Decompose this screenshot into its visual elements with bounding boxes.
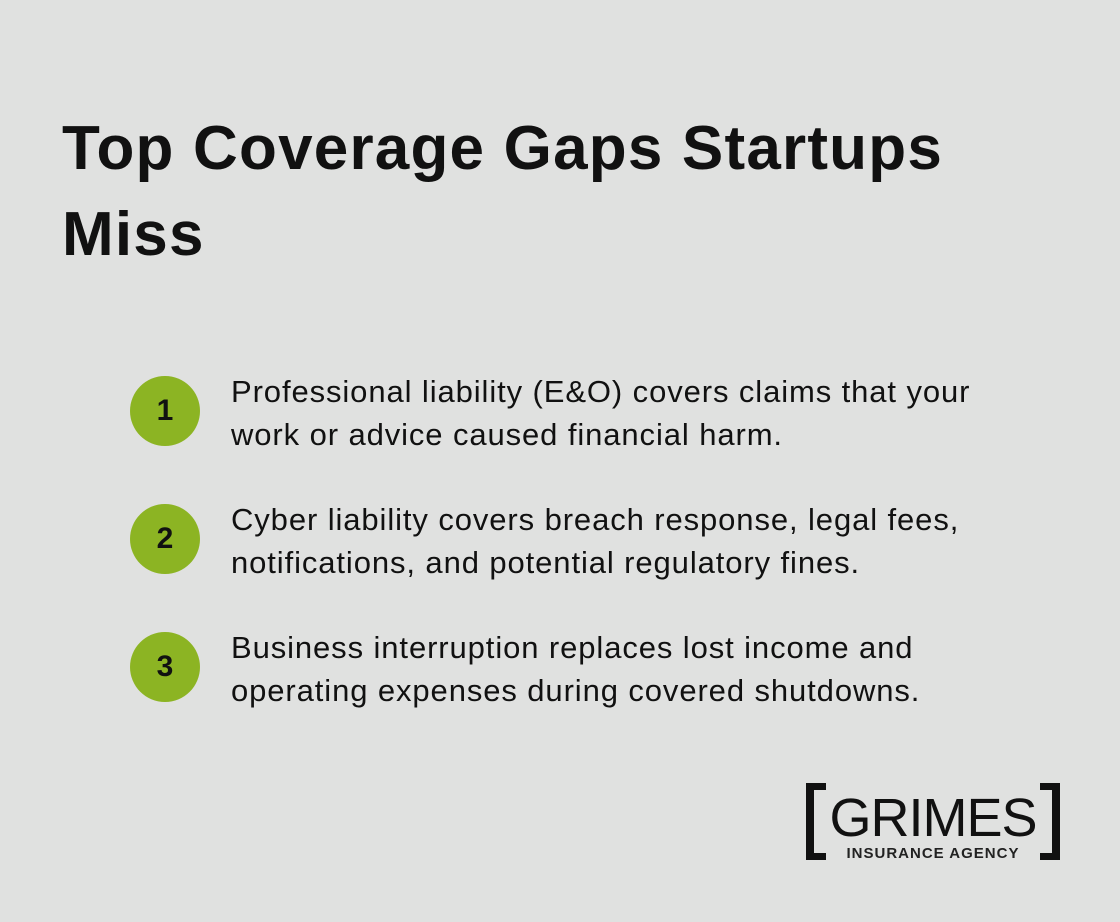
number badge 2: 2 [157,522,173,555]
number badge 1 [130,376,200,446]
item 1 [130,374,970,452]
logo [806,783,1060,862]
text 2: Cyber liability covers breach response, legal fees, [231,502,959,537]
text 3: Business interruption replaces lost income and [231,630,913,665]
number badge 3 [130,632,200,702]
text 2: notifications, and potential regulatory fines. [231,545,860,580]
text 2 [231,502,959,580]
title [62,114,943,269]
text 1 [231,374,970,452]
number badge 2 [130,504,200,574]
text 1: Professional liability (E&O) covers claims that your [231,374,970,409]
number badge 1: 1 [157,394,173,427]
text 3: operating expenses during covered shutdowns. [231,673,920,708]
title: Miss [62,200,205,269]
number badge 3: 3 [157,650,173,683]
text 1: work or advice caused financial harm. [231,417,783,452]
item 3 [130,630,920,708]
logo: GRIMES [829,788,1037,848]
logo: INSURANCE AGENCY [847,845,1019,862]
title: Top Coverage Gaps Startups [62,114,943,183]
item 2 [130,502,959,580]
text 3 [231,630,920,708]
